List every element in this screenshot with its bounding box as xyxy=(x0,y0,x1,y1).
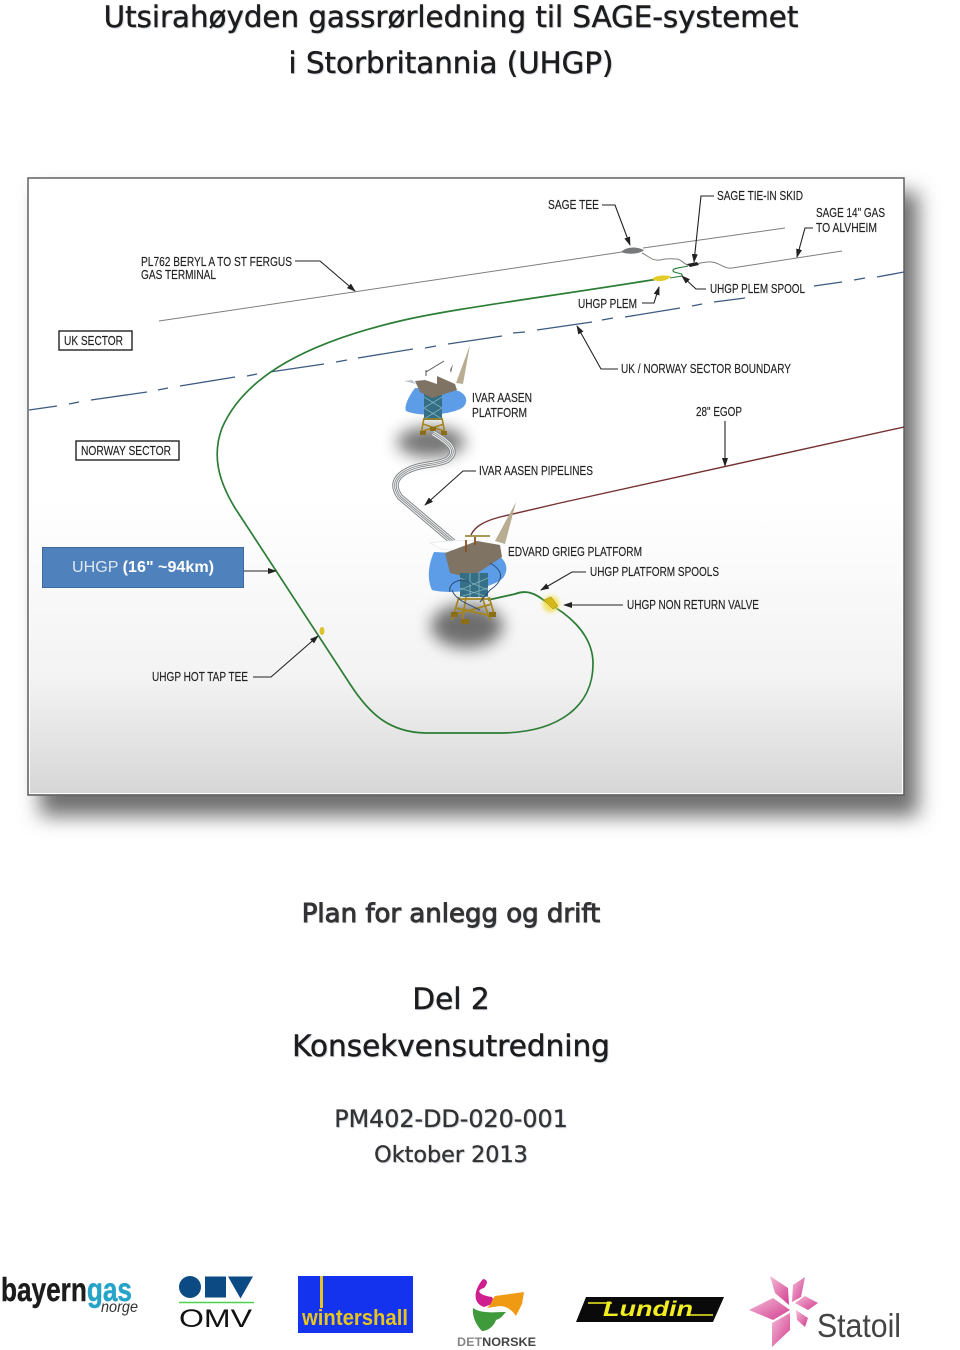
title xyxy=(104,0,799,80)
non return valve xyxy=(543,596,559,612)
labels: SAGE TEE xyxy=(548,197,599,212)
logo: wintershall: wintershall xyxy=(301,1305,408,1330)
logo: Det Norske: DETNORSKE xyxy=(457,1337,536,1349)
logo: bayerngas norge: norge xyxy=(101,1299,138,1316)
Ivar Aasen platform shadow xyxy=(397,427,465,457)
labels: UHGP NON RETURN VALVE xyxy=(627,597,759,612)
UK sector box: UK SECTOR xyxy=(64,333,123,348)
28 inch EGOP pipeline xyxy=(471,427,904,535)
logo: Statoil: Statoil xyxy=(817,1307,901,1344)
subtitle: Plan for anlegg og drift xyxy=(302,899,600,929)
UHGP callout: UHGP (16" ~94km) xyxy=(72,559,214,576)
Edvard Grieg platform xyxy=(429,502,516,648)
logo: Lundin xyxy=(576,1297,724,1322)
SAGE pipelines xyxy=(159,228,842,321)
labels xyxy=(141,188,885,684)
part heading xyxy=(292,982,610,1064)
UHGP callout xyxy=(42,548,244,588)
document reference and date: Oktober 2013 xyxy=(374,1142,528,1168)
labels: IVAR AASEN PIPELINES xyxy=(479,463,593,478)
panel background xyxy=(28,178,904,795)
document reference and date: PM402-DD-020-001 xyxy=(334,1105,568,1133)
leader lines xyxy=(244,196,813,677)
logo: Det Norske xyxy=(457,1279,536,1349)
labels: UHGP HOT TAP TEE xyxy=(152,669,248,684)
UK sector box xyxy=(59,331,132,350)
part heading: Del 2 xyxy=(412,982,490,1016)
SAGE tee xyxy=(621,248,644,254)
labels: PLATFORM xyxy=(472,405,527,420)
labels: UHGP PLEM xyxy=(578,296,637,311)
labels: SAGE TIE-IN SKID xyxy=(717,188,803,203)
hot tap tee xyxy=(320,627,324,635)
labels: UK / NORWAY SECTOR BOUNDARY xyxy=(621,361,791,376)
Norway sector box: NORWAY SECTOR xyxy=(81,443,171,458)
logo: Statoil xyxy=(749,1276,901,1347)
partner logos xyxy=(1,1271,901,1349)
map diagram panel xyxy=(24,176,934,832)
labels: EDVARD GRIEG PLATFORM xyxy=(508,544,642,559)
UHGP PLEM xyxy=(652,275,671,281)
UK / Norway sector boundary xyxy=(29,272,904,410)
labels: IVAR AASEN xyxy=(472,390,532,405)
labels: TO ALVHEIM xyxy=(816,220,877,235)
labels: PL762 BERYL A TO ST FERGUS xyxy=(141,254,292,269)
title: Utsirahøyden gassrørledning til SAGE-systemet xyxy=(104,0,798,34)
SAGE tie-in skid xyxy=(687,262,699,267)
Norway sector box xyxy=(76,441,179,460)
logo: OMV xyxy=(179,1276,254,1333)
labels: UHGP PLEM SPOOL xyxy=(710,281,805,296)
title: i Storbritannia (UHGP) xyxy=(288,46,613,80)
document reference and date xyxy=(334,1105,568,1168)
labels: 28" EGOP xyxy=(696,404,742,419)
panel drop shadow xyxy=(40,192,918,816)
Ivar Aasen pipelines xyxy=(395,433,453,542)
part heading: Konsekvensutredning xyxy=(292,1029,610,1063)
labels: GAS TERMINAL xyxy=(141,267,216,282)
labels: SAGE 14" GAS xyxy=(816,205,885,220)
labels: UHGP PLATFORM SPOOLS xyxy=(590,564,719,579)
UHGP pipeline xyxy=(670,266,688,278)
logo: bayerngas norge: bayerngas xyxy=(1,1271,132,1308)
Ivar Aasen platform xyxy=(404,345,470,435)
logo: wintershall xyxy=(298,1276,413,1333)
logo: Lundin: Lundin xyxy=(603,1298,693,1321)
logo: OMV: OMV xyxy=(179,1305,252,1333)
